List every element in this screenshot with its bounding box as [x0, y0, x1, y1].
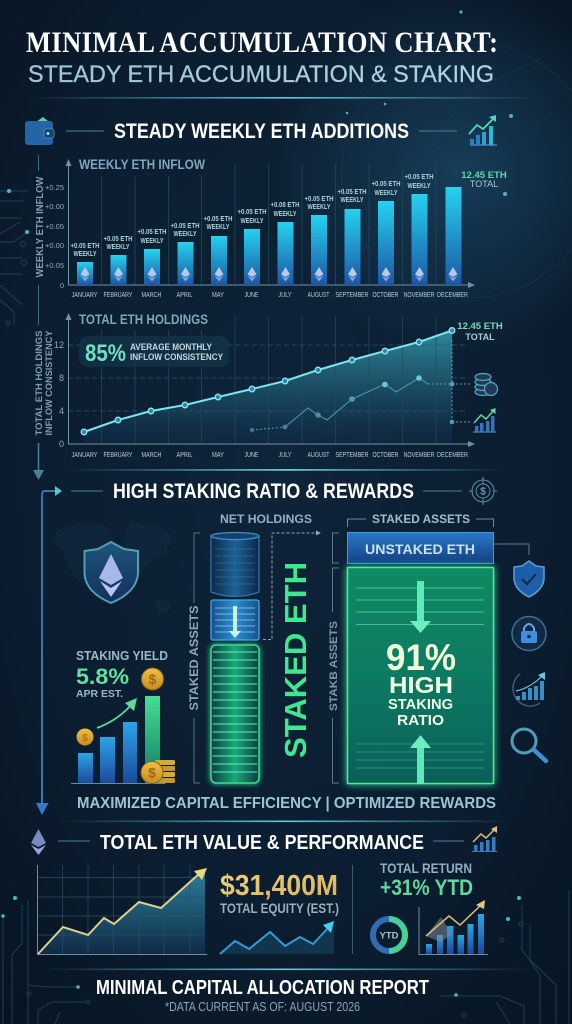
- bar value labels: WEEKLY: [274, 209, 296, 218]
- icon: eth diamond: [31, 829, 46, 855]
- month labels: MAY: [212, 452, 224, 459]
- icon: magnifier: [512, 729, 546, 761]
- stacked cylinder: [211, 532, 259, 783]
- stake assets left label: [328, 568, 340, 783]
- callout: 85 percent: 85%: [85, 340, 126, 367]
- bar value labels: WEEKLY: [74, 249, 96, 258]
- y axis labels: 0: [60, 281, 64, 290]
- total label: TOTAL: [465, 332, 495, 342]
- month labels: DECEMBER: [437, 452, 468, 459]
- bar value labels: WEEKLY: [240, 216, 264, 225]
- bar value labels: WEEKLY: [206, 222, 230, 231]
- callout: 85 percent: [79, 336, 229, 367]
- month labels: JUNE: [244, 292, 259, 299]
- bar value labels: +0.05 ETH: [372, 179, 400, 188]
- staked assets side label: [189, 533, 201, 783]
- total equity label: TOTAL EQUITY (EST.): [220, 900, 339, 916]
- bar value labels: WEEKLY: [340, 195, 364, 204]
- bar value labels: WEEKLY: [408, 181, 430, 190]
- capital efficiency statement: MAXIMIZED CAPITAL EFFICIENCY | OPTIMIZED REWARDS: [77, 795, 496, 812]
- mini bars: [71, 696, 165, 784]
- bar value labels: +0.05 ETH: [304, 194, 334, 203]
- icon: trend chart: [473, 408, 496, 432]
- mini bar chart: [419, 900, 488, 954]
- month labels: FEBRUARY: [104, 452, 133, 459]
- staked assets top label: STAKED ASSETS: [372, 512, 470, 526]
- bar value labels: WEEKLY: [106, 242, 130, 251]
- y axis labels: +0.05: [45, 222, 64, 231]
- ratio label: RATIO: [397, 713, 444, 729]
- coins: [76, 668, 175, 784]
- secondary line: [252, 340, 472, 430]
- bar value labels: +0.05 ETH: [204, 214, 232, 223]
- icon: dollar target: $: [480, 486, 486, 498]
- ratio label: HIGH: [389, 672, 453, 698]
- arrow: down to staking section: [33, 443, 44, 480]
- chart title: WEEKLY ETH INFLOW: [79, 157, 205, 172]
- icon: shield check: [514, 561, 544, 597]
- month labels: [72, 292, 468, 299]
- bar value labels: +0.05 ETH: [170, 221, 200, 230]
- callout: 85 percent: AVERAGE MONTHLY: [130, 342, 212, 352]
- total equity value: $31,400M: [220, 870, 338, 902]
- heading: high staking ratio: HIGH STAKING RATIO & REWARDS: [113, 480, 414, 503]
- ratio label: STAKING: [388, 697, 453, 713]
- chart title: TOTAL ETH HOLDINGS: [79, 312, 208, 327]
- stake assets left label: STAKB ASSETS: [328, 621, 340, 711]
- icon: eth shield: [84, 542, 138, 603]
- month labels: SEPTEMBER: [336, 452, 368, 459]
- y axis labels: +0.05: [45, 261, 64, 270]
- icon: performance gauge: [513, 672, 545, 706]
- icon: growth chart top: [469, 115, 497, 145]
- month labels: JULY: [278, 452, 292, 459]
- staked eth vertical label: STAKED ETH: [278, 562, 313, 758]
- total label: 12.45 ETH: [461, 170, 507, 181]
- icon: dollar target: [469, 477, 497, 505]
- y axis labels: 4: [59, 406, 64, 416]
- bar value labels: +0.05 ETH: [104, 234, 132, 243]
- y axis title: TOTAL ETH HOLDINGS: [34, 330, 45, 436]
- y axis title: WEEKLY ETH INFLOW: [34, 176, 46, 278]
- coins: $: [148, 764, 156, 780]
- month labels: OCTOBER: [372, 292, 398, 299]
- month labels: APRIL: [176, 292, 193, 299]
- month labels: JANUARY: [72, 452, 98, 459]
- month labels: AUGUST: [308, 292, 330, 299]
- bar value labels: WEEKLY: [374, 188, 398, 197]
- month labels: AUGUST: [308, 452, 330, 459]
- month labels: DECEMBER: [437, 292, 468, 299]
- total label: [461, 170, 507, 189]
- y axis labels: 0: [59, 439, 64, 449]
- bar value labels: +0.05 ETH: [138, 227, 166, 236]
- staking yield panel: [71, 649, 175, 784]
- bar value labels: WEEKLY: [140, 236, 164, 245]
- net holdings label: NET HOLDINGS: [220, 512, 312, 526]
- yield value: 5.8%: [76, 664, 129, 689]
- footer note: *DATA CURRENT AS OF: AUGUST 2026: [165, 999, 360, 1014]
- heading: steady weekly additions: STEADY WEEKLY ETH ADDITIONS: [114, 120, 409, 143]
- bar value labels: +0.05 ETH: [238, 207, 266, 216]
- title: [26, 27, 498, 88]
- unstaked eth box: [348, 532, 494, 564]
- total label: TOTAL: [470, 179, 498, 189]
- high staking ratio box: [348, 568, 494, 784]
- world map: [52, 522, 172, 614]
- icon: gold growth chart: [472, 826, 497, 852]
- chart: weekly eth inflow: [34, 155, 507, 325]
- month labels: JUNE: [244, 452, 259, 459]
- ytd donut: YTD: [380, 930, 399, 942]
- bar value labels: +0.05 ETH: [338, 187, 366, 196]
- bar value labels: WEEKLY: [174, 229, 196, 238]
- bar value labels: [70, 172, 434, 258]
- month labels: JANUARY: [72, 292, 98, 299]
- bar value labels: +0.08 ETH: [270, 200, 300, 209]
- month labels: [72, 452, 468, 459]
- arrow: up: [410, 735, 431, 784]
- unstaked eth box: UNSTAKED ETH: [365, 541, 475, 557]
- apr label: APR EST.: [76, 689, 123, 700]
- y axis title: [34, 330, 55, 436]
- cylinder mid blue: [211, 600, 259, 640]
- ratio label: [388, 672, 453, 729]
- callout: 85 percent: INFLOW CONSISTENCY: [130, 352, 223, 362]
- cylinder green: [211, 645, 259, 783]
- heading: total eth value: TOTAL ETH VALUE & PERFORMANCE: [100, 831, 424, 854]
- area chart: total value: [38, 865, 207, 954]
- arrow: down: [410, 581, 431, 633]
- month labels: APRIL: [176, 452, 193, 459]
- mini line chart: [220, 921, 334, 954]
- bar value labels: WEEKLY: [308, 202, 330, 211]
- month labels: JULY: [278, 292, 292, 299]
- month labels: FEBRUARY: [104, 292, 133, 299]
- yield label: STAKING YIELD: [76, 649, 168, 663]
- month labels: NOVEMBER: [404, 452, 434, 459]
- y axis labels: +0.00: [45, 202, 64, 211]
- growth arrow: [97, 698, 137, 728]
- chart: total eth holdings: [34, 312, 503, 459]
- cylinder top blue: [211, 532, 259, 596]
- bar value labels: +0.05 ETH: [70, 241, 100, 250]
- y axis labels: 12: [54, 340, 64, 350]
- coins: $: [82, 733, 88, 744]
- dashed connector: [263, 530, 321, 640]
- icon: lock: [512, 616, 546, 650]
- bar eth glyphs: [80, 267, 458, 282]
- total label: [457, 321, 503, 342]
- y axis labels: +0.25: [45, 183, 64, 192]
- staked assets top label: [348, 512, 494, 527]
- month labels: MAY: [212, 292, 224, 299]
- bars: [77, 187, 462, 285]
- y axis title: INFLOW CONSISTENCY: [44, 330, 55, 436]
- arrow: left flow line: [36, 486, 62, 815]
- y axis labels: [54, 340, 64, 449]
- total return label: TOTAL RETURN: [380, 861, 472, 876]
- month labels: MARCH: [142, 292, 162, 299]
- title: STEADY ETH ACCUMULATION & STAKING: [28, 61, 494, 88]
- title: MINIMAL ACCUMULATION CHART:: [26, 27, 498, 59]
- bar value labels: +0.05 ETH: [404, 172, 434, 181]
- y axis labels: 8: [59, 373, 64, 383]
- ytd donut: [373, 919, 405, 951]
- month labels: OCTOBER: [372, 452, 398, 459]
- ratio value: 91%: [386, 637, 456, 678]
- footer title: MINIMAL CAPITAL ALLOCATION REPORT: [96, 977, 429, 999]
- staked assets side label: STAKED ASSETS: [189, 605, 201, 710]
- total label: 12.45 ETH: [457, 321, 503, 332]
- total return value: +31% YTD: [380, 875, 473, 900]
- y axis labels: +0.00: [45, 241, 64, 250]
- coins: $: [149, 671, 157, 687]
- icon: coin stack: [475, 374, 498, 396]
- y axis labels: [45, 183, 64, 290]
- month labels: MARCH: [142, 452, 162, 459]
- main line: [81, 328, 455, 435]
- month labels: SEPTEMBER: [336, 292, 368, 299]
- icon: wallet: [25, 117, 54, 145]
- month labels: NOVEMBER: [404, 292, 434, 299]
